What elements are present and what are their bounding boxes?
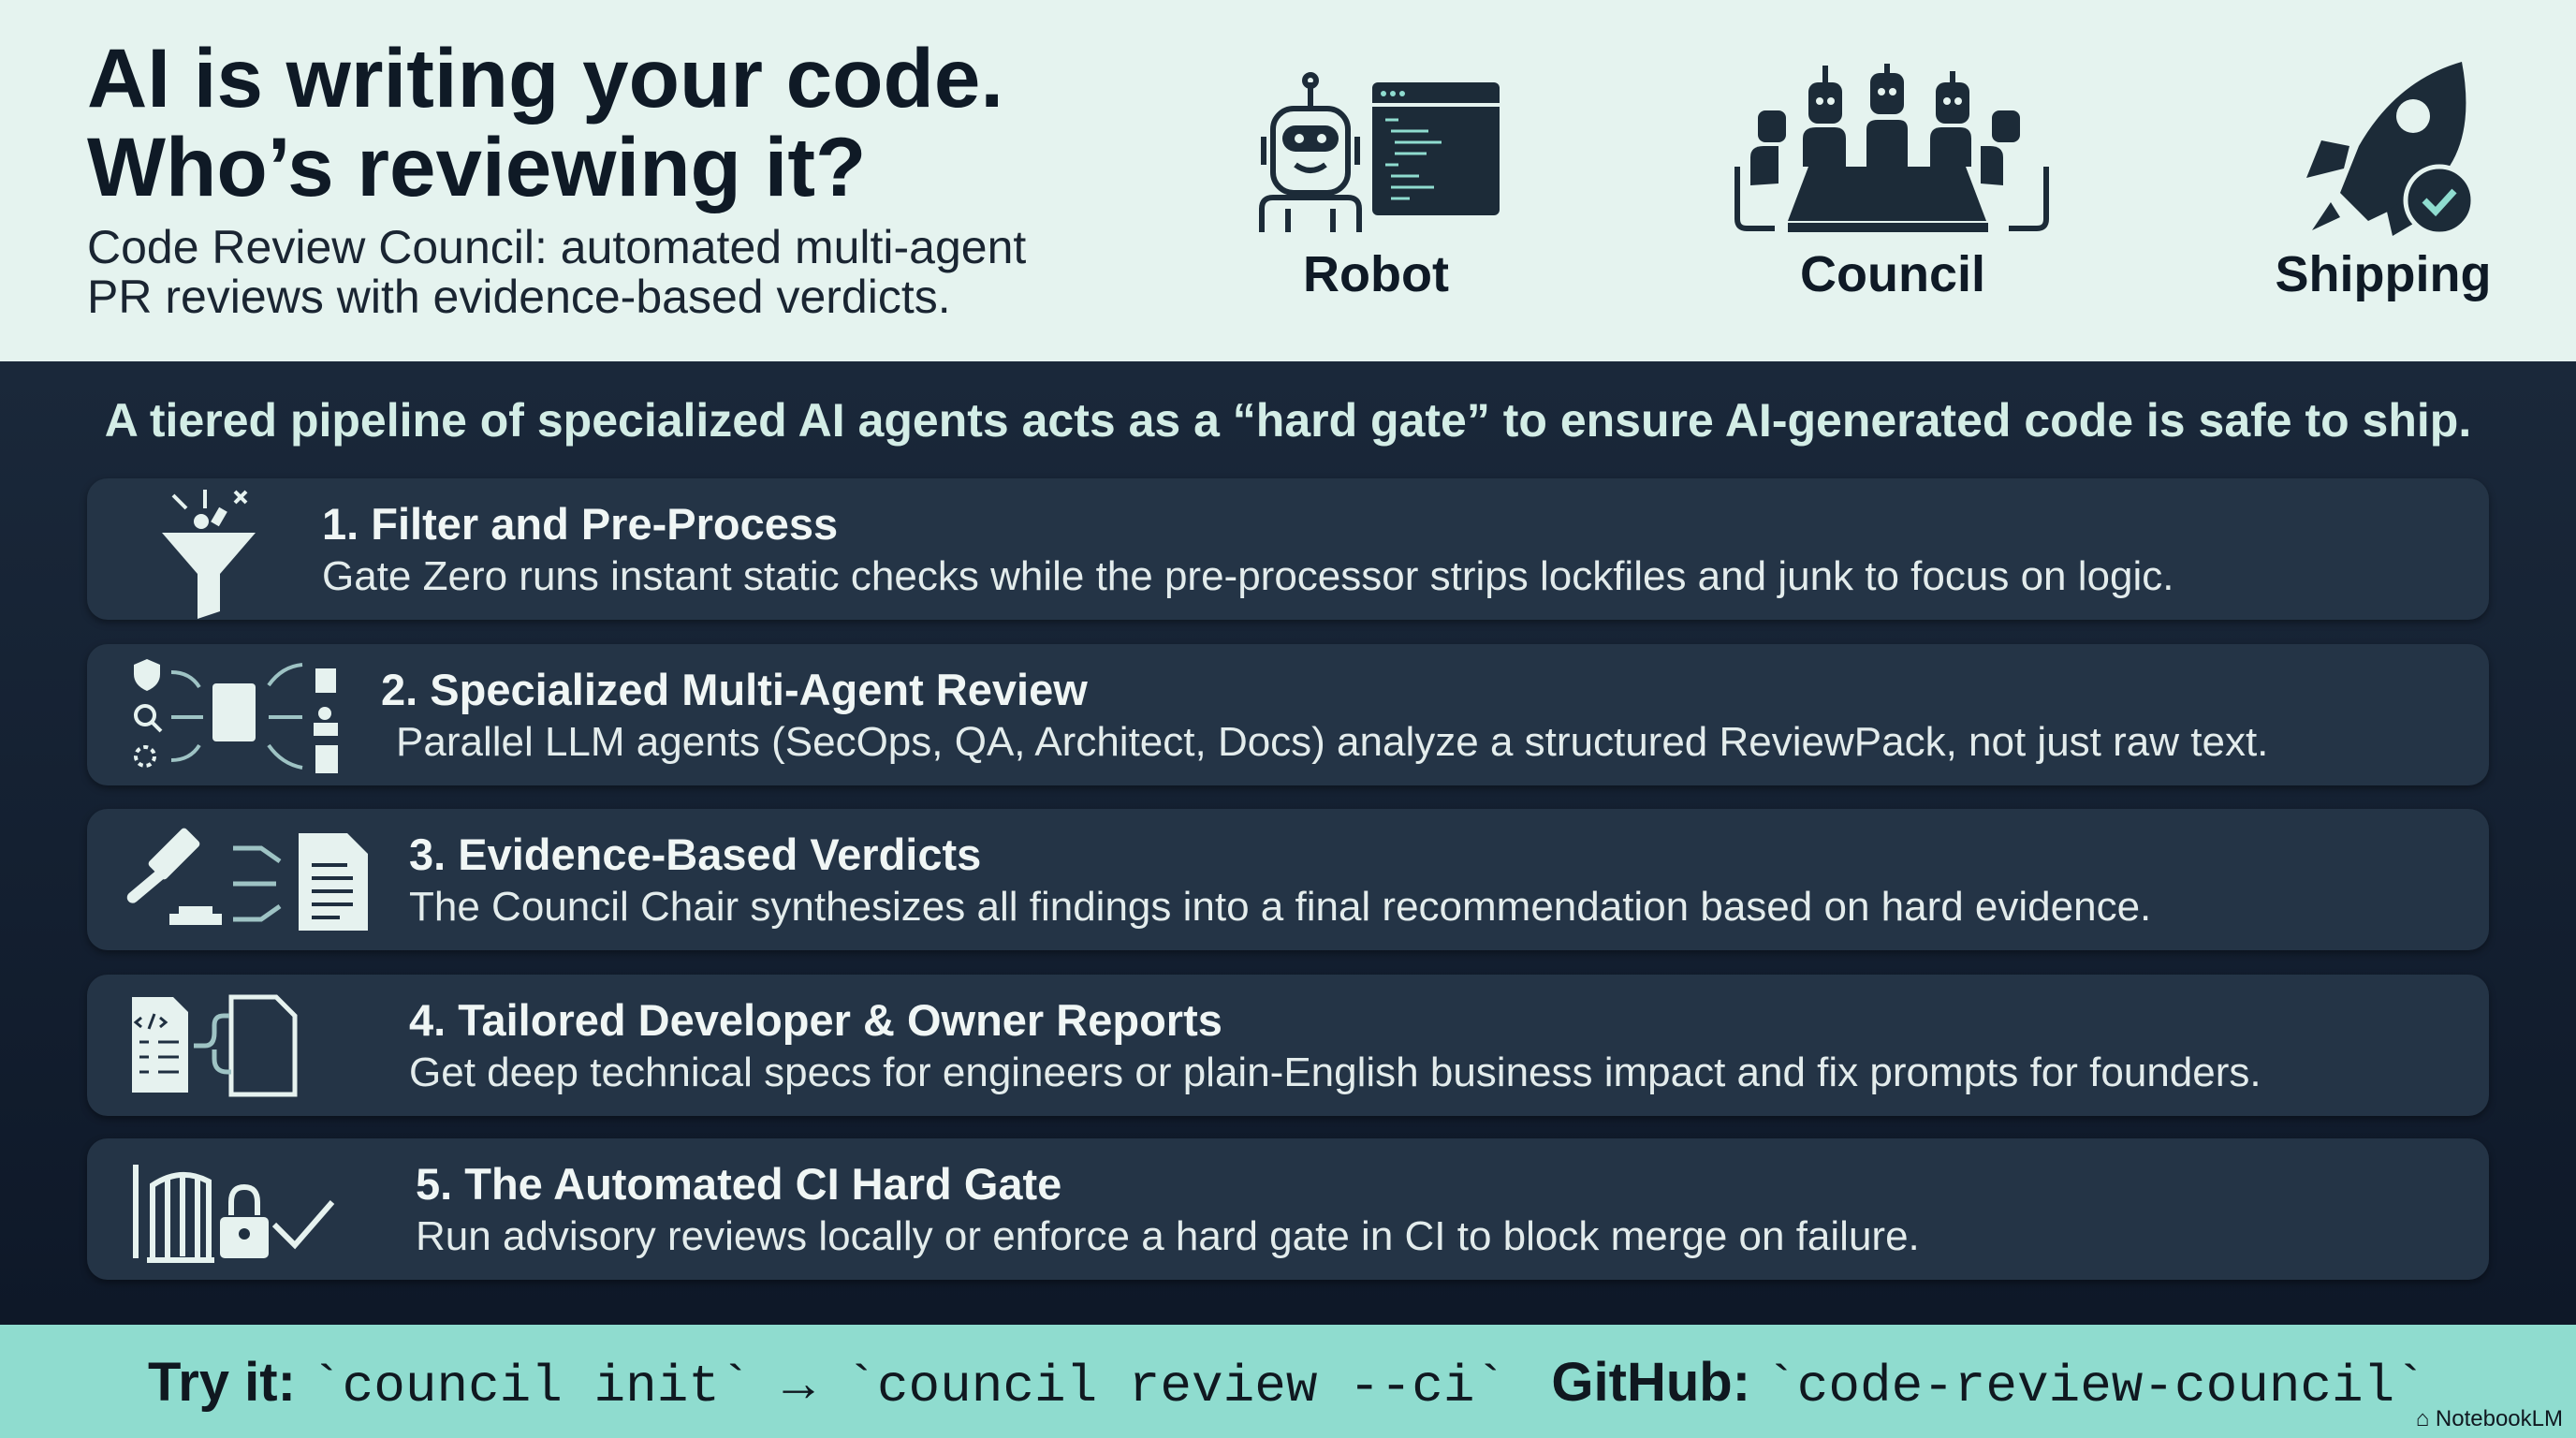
- icon: gavel: [127, 828, 368, 931]
- icon: robot: [1259, 72, 1500, 232]
- header band: [0, 0, 2576, 361]
- footer: [0, 1325, 2576, 1438]
- subtitle: Code Review Council: automated multi-agent: [87, 221, 1026, 273]
- icon: rocket: [2306, 62, 2471, 236]
- footer text: Try it: `council init` → `council review --ci` GitHub: `code-review-council`: [148, 1352, 2426, 1416]
- heading: 1. Filter and Pre-Process: [322, 499, 838, 549]
- heading: 5. The Automated CI Hard Gate: [416, 1159, 1061, 1209]
- tagline: A tiered pipeline of specialized AI agents acts as a “hard gate” to ensure AI-generated code is safe to ship.: [105, 394, 2471, 447]
- panel: step 4: [87, 975, 2489, 1116]
- icon: gate lock: [133, 1165, 335, 1263]
- text: Parallel LLM agents (SecOps, QA, Architect, Docs) analyze a structured ReviewPack, not just raw text.: [396, 719, 2268, 765]
- dark section: [0, 361, 2576, 1326]
- label: shipping: Shipping: [2276, 246, 2491, 302]
- label: robot: Robot: [1303, 246, 1449, 302]
- heading: 4. Tailored Developer & Owner Reports: [409, 995, 1222, 1045]
- subtitle: PR reviews with evidence-based verdicts.: [87, 271, 951, 323]
- label: council: Council: [1800, 246, 1985, 302]
- icon: council: [1734, 64, 2049, 232]
- brand mark: ⌂ NotebookLM: [2416, 1406, 2563, 1431]
- heading: 3. Evidence-Based Verdicts: [409, 829, 981, 879]
- text: Get deep technical specs for engineers or plain-English business impact and fix prompts for founders.: [409, 1049, 2261, 1095]
- panel: step 3: [87, 809, 2489, 950]
- panel: step 2: [87, 644, 2489, 785]
- panel: step 5: [87, 1138, 2489, 1280]
- icon: reports: [132, 994, 298, 1097]
- text: Gate Zero runs instant static checks while the pre-processor strips lockfiles and junk to focus on logic.: [322, 553, 2174, 599]
- title: Who’s reviewing it?: [87, 120, 866, 213]
- icon: funnel: [162, 490, 256, 619]
- title: AI is writing your code.: [87, 31, 1003, 125]
- title: [87, 31, 1003, 213]
- text: Run advisory reviews locally or enforce a hard gate in CI to block merge on failure.: [416, 1213, 1920, 1259]
- panel: step 1: [87, 478, 2489, 620]
- text: The Council Chair synthesizes all findings into a final recommendation based on hard evidence.: [409, 884, 2151, 930]
- icon: agents: [134, 659, 338, 773]
- heading: 2. Specialized Multi-Agent Review: [381, 665, 1088, 714]
- subtitle: [87, 221, 1026, 323]
